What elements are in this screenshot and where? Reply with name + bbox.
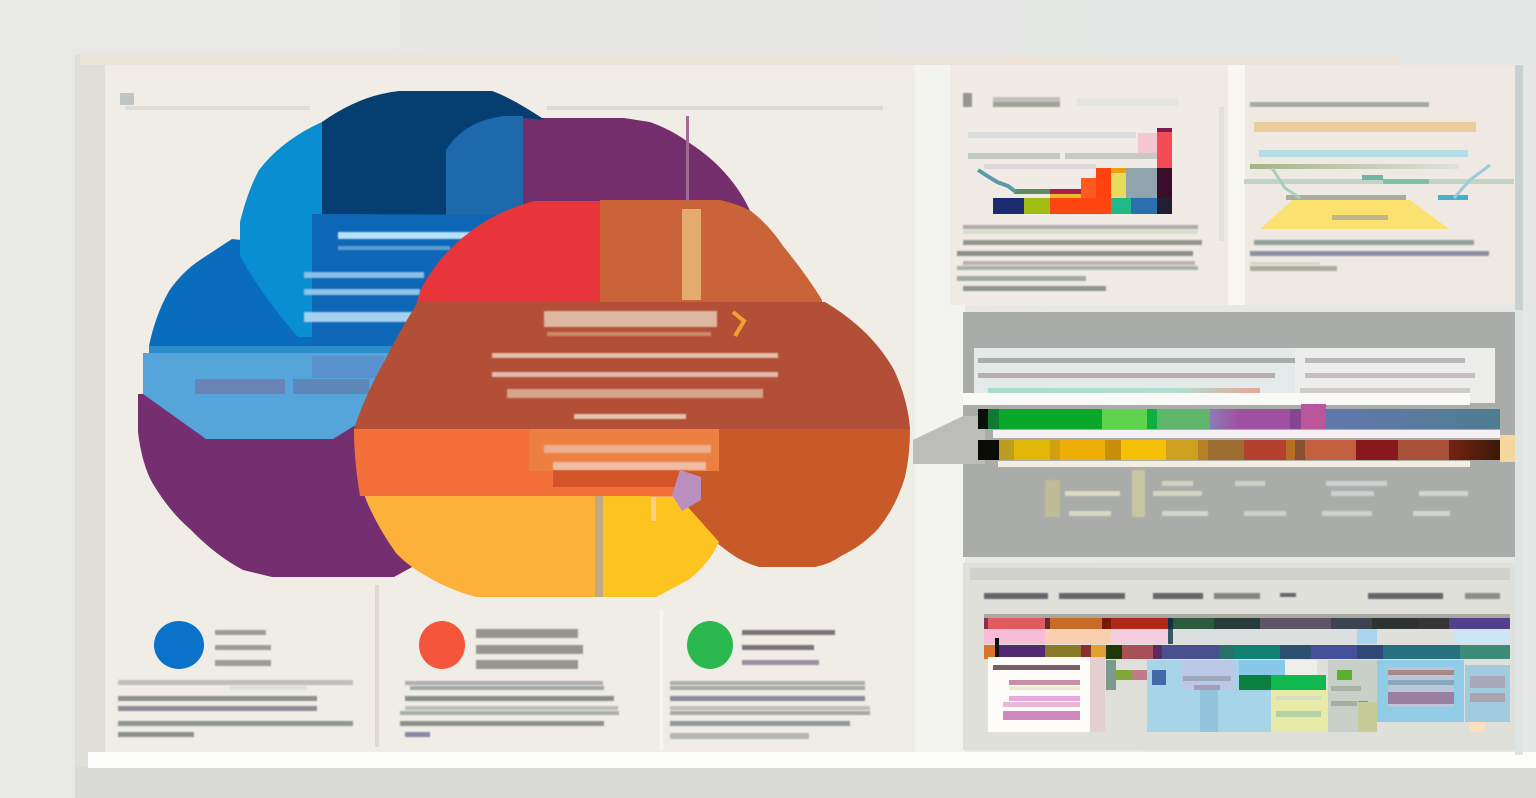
panel: stacked chart <box>950 65 1228 305</box>
card: gray column <box>1328 660 1377 732</box>
segment: purple upper right <box>500 118 751 230</box>
segment: brown band <box>354 302 910 429</box>
header table <box>963 348 1495 405</box>
text: area chart notes <box>1250 240 1489 271</box>
trend line <box>978 170 1016 192</box>
trend lines <box>1272 168 1300 198</box>
area shape <box>1260 200 1449 229</box>
segment: cyan blue <box>240 122 340 337</box>
legend item: red <box>400 621 619 737</box>
heading: main panel <box>120 93 883 110</box>
table heading labels <box>984 593 1500 599</box>
callout text: brown band <box>492 311 778 419</box>
card: blue schedule blocks <box>1147 660 1317 732</box>
faint text columns <box>1045 470 1468 517</box>
vertical line <box>686 116 689 201</box>
heading: stacked chart <box>963 93 1178 107</box>
callout text: orange band <box>544 445 711 470</box>
segment: right lower lobe <box>660 429 910 567</box>
text: green item <box>670 630 870 739</box>
legend item: green <box>670 621 870 739</box>
stacked bar chart <box>968 128 1172 214</box>
segment: light blue band <box>143 353 395 439</box>
icon: red dot <box>419 621 465 669</box>
blue text block <box>304 232 473 322</box>
venn diagram <box>138 91 910 597</box>
panel: schedule table <box>963 563 1515 750</box>
white separator lower <box>998 461 1470 467</box>
card: green and yellow block <box>1239 675 1328 732</box>
segment: blue seam <box>149 346 399 353</box>
heading: area chart <box>1250 102 1429 107</box>
icon: blue dot <box>154 621 204 669</box>
text: red item <box>400 629 619 737</box>
table row 3 <box>984 638 1510 659</box>
legend item: blue <box>118 621 353 737</box>
card: blue framed note <box>1377 660 1464 722</box>
panel: gray timeline <box>913 312 1515 557</box>
panel: main diagram <box>105 65 915 752</box>
icon: chevron <box>733 312 744 336</box>
text: blue item <box>118 630 353 737</box>
dividers <box>375 585 663 750</box>
small swatches <box>1106 660 1152 690</box>
panel: line and area chart <box>1219 65 1515 305</box>
connector tab <box>913 416 985 464</box>
card: white note <box>988 657 1105 732</box>
table row 2 <box>984 629 1510 644</box>
yellow and brown band <box>978 435 1515 462</box>
segment: navy top <box>322 91 545 215</box>
text: stacked chart notes <box>957 225 1202 291</box>
segment: red <box>416 201 600 306</box>
green and purple band <box>978 404 1500 429</box>
white separator <box>993 430 1500 438</box>
segment: orange band <box>354 429 719 511</box>
segment: orange upper <box>600 200 822 306</box>
segment: blue overlay <box>446 116 523 215</box>
segment: deep blue column <box>312 214 502 346</box>
card: right side note <box>1465 665 1510 732</box>
table row 1 <box>984 614 1510 629</box>
segment: yellow and amber base <box>365 487 719 597</box>
segment: purple lower left <box>138 390 450 577</box>
icon: green dot <box>687 621 733 669</box>
segment: mid blue <box>149 239 420 346</box>
area chart <box>1244 122 1514 229</box>
